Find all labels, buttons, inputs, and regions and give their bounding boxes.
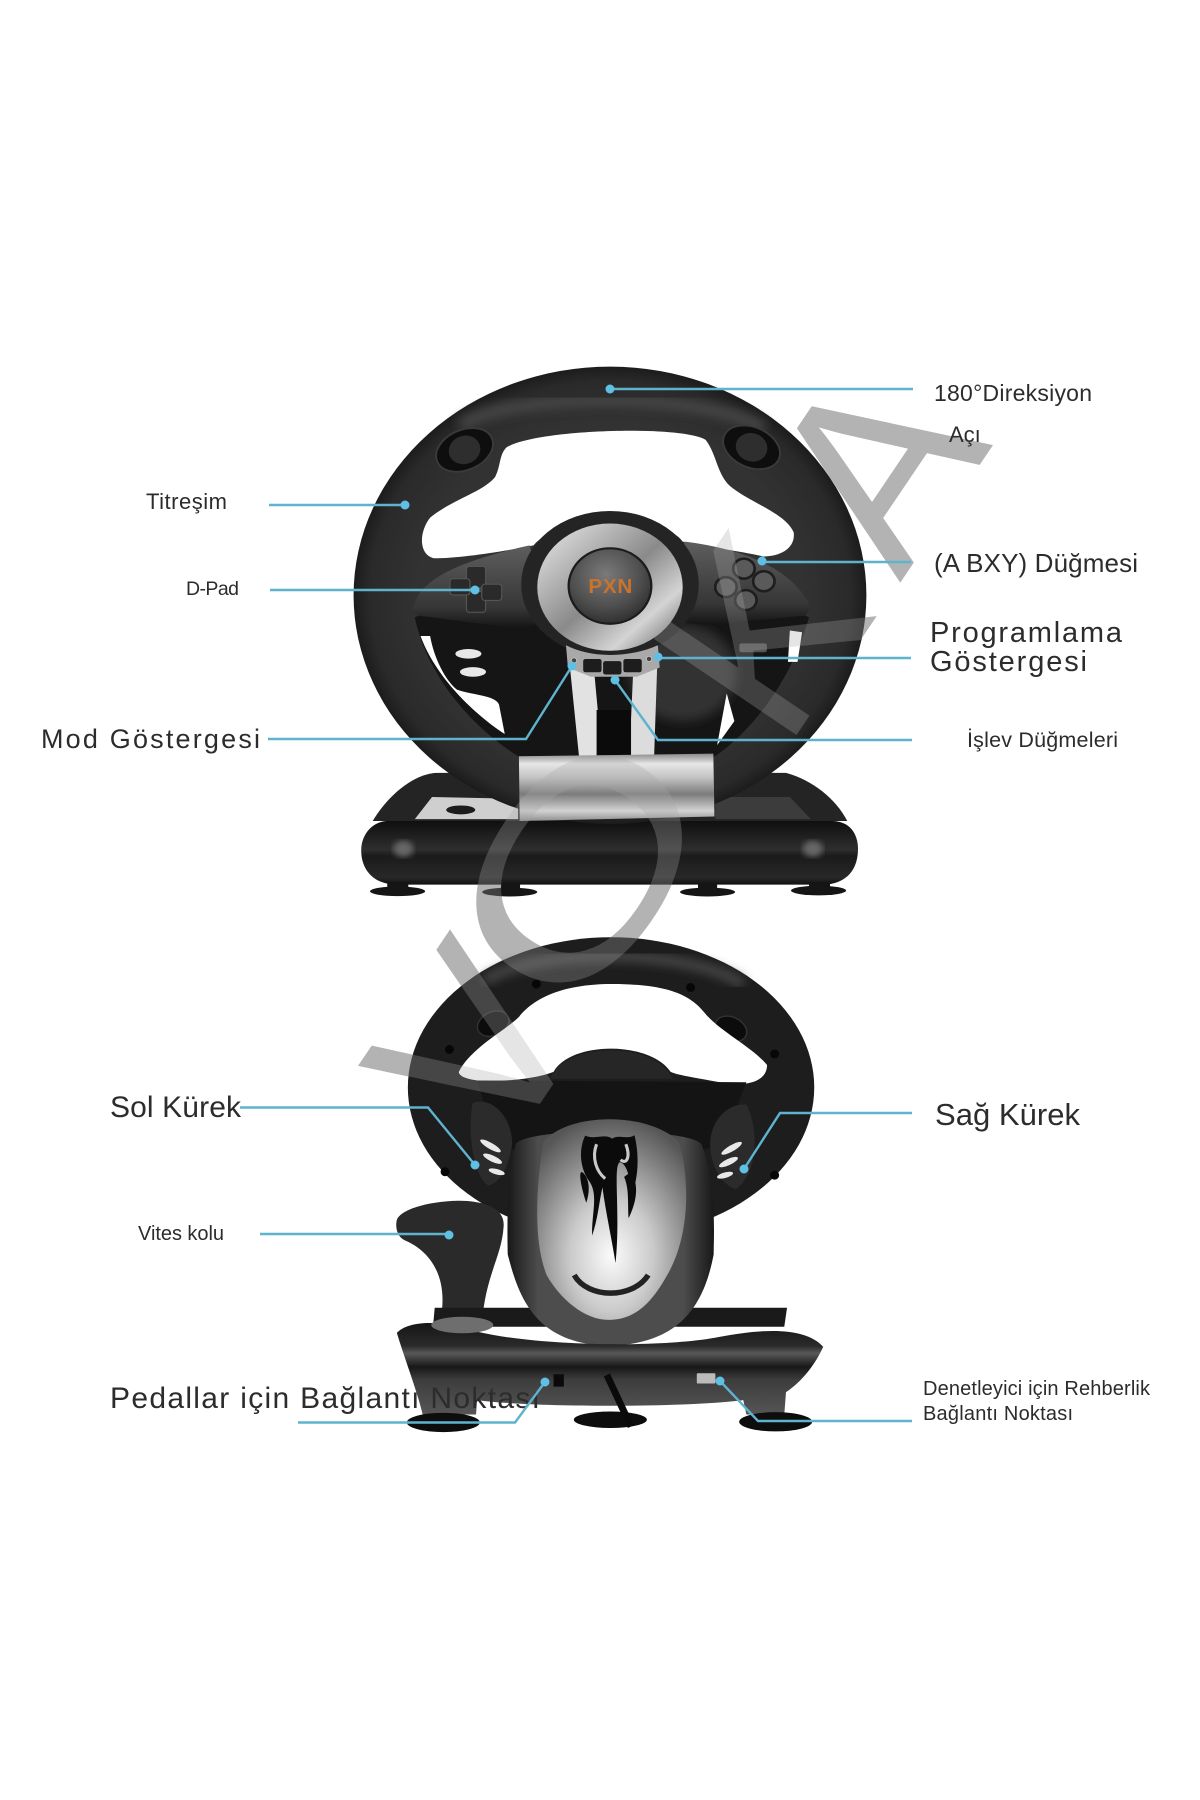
- callout: Vites kolu: Vites kolu: [138, 1223, 224, 1245]
- hub collar: [521, 511, 699, 657]
- flame emblem: [580, 1135, 638, 1263]
- lower silver bar: [519, 754, 714, 821]
- callout: Denetleyici için Rehberlik Bağlantı Noktası: Denetleyici için Rehberlik: [923, 1378, 1151, 1400]
- rear steering wheel: [396, 937, 823, 1432]
- callout: Titreşim: [146, 489, 410, 514]
- callout: Sol Kürek: Sol Kürek: [110, 1091, 242, 1124]
- callout: Sağ Kürek: Sağ Kürek: [935, 1097, 1080, 1132]
- front steering wheel: [354, 367, 866, 896]
- logo cap: [569, 548, 651, 624]
- callout: Vites kolu: [138, 1223, 454, 1245]
- callout: D-Pad: D-Pad: [186, 578, 239, 600]
- lower cavity openings: [421, 630, 802, 745]
- spoke mass: [478, 1080, 746, 1151]
- pedal port: [554, 1374, 564, 1387]
- rear cable: [607, 1375, 631, 1427]
- spoke gap: [597, 710, 631, 758]
- right arm: [667, 542, 811, 625]
- left arm: [413, 545, 549, 629]
- watermark: A: [713, 318, 1037, 613]
- abxy buttons: [715, 559, 775, 610]
- base highlights: [393, 841, 413, 857]
- left paddle: [471, 1102, 512, 1186]
- cavity body shading: [629, 625, 736, 721]
- tray socket: [446, 805, 475, 814]
- lower cavity: [415, 581, 809, 756]
- callout: Programlama Göstergesi: [654, 617, 1123, 678]
- callout: Programlama Göstergesi: Programlama: [930, 617, 1123, 649]
- left paddle vents: [455, 649, 486, 677]
- front base rear plate: [373, 773, 847, 821]
- wheel rim: [354, 367, 866, 824]
- rim highlight: [461, 401, 763, 429]
- usb port: [697, 1373, 715, 1384]
- front base right tray: [715, 797, 811, 819]
- rear base plate: [433, 1308, 787, 1327]
- watermark over products: A: [713, 318, 1037, 613]
- callout: Mod Göstergesi: Mod Göstergesi: [41, 724, 260, 754]
- rear upper opening: [459, 984, 767, 1084]
- label: Pedallar için Bağlantı Noktası: Pedallar için Bağlantı Noktası: [110, 1382, 540, 1415]
- callout: (A BXY) Düğmesi: (A BXY) Düğmesi: [934, 548, 1138, 578]
- front base left tray: [415, 797, 518, 819]
- function plate: [566, 645, 660, 677]
- rear base: [397, 1323, 823, 1415]
- callout: Titreşim: Titreşim: [146, 489, 227, 514]
- silver ring: [537, 524, 683, 651]
- callout: 180° Direksiyon Açı: Açı: [949, 422, 981, 447]
- callout: Sol Kürek: [110, 1091, 480, 1170]
- watermark: V: [313, 898, 637, 1193]
- indicator leds: [571, 656, 652, 663]
- base feet: [370, 882, 846, 896]
- callout: 180° Direksiyon Açı: 180°Direksiyon: [934, 380, 1092, 406]
- watermark: K: [598, 487, 922, 782]
- left shoulder buttons: [429, 420, 500, 480]
- rear pedestal: [507, 1131, 714, 1346]
- shield base slots: [574, 1275, 648, 1293]
- rear wheel rim: [408, 937, 814, 1238]
- watermark over products: K: [598, 487, 922, 782]
- shifter knob: [396, 1201, 504, 1313]
- rear base feet: [407, 1411, 812, 1432]
- paddle vents: [479, 1137, 743, 1180]
- rear rim highlight: [485, 956, 743, 984]
- flame highlights: [595, 1144, 628, 1179]
- callout: 180° Direksiyon Açı: [606, 380, 1092, 447]
- watermark: O: [388, 678, 771, 1060]
- callout: İşlev Düğmeleri: İşlev Düğmeleri: [967, 728, 1118, 752]
- rear dome: [550, 1050, 672, 1079]
- watermark: [313, 318, 1037, 1193]
- callout: (A BXY) Düğmesi: [758, 548, 1138, 578]
- rim screw holes: [441, 980, 779, 1180]
- callout: Mod Göstergesi: [41, 662, 576, 754]
- callout: Denetleyici için Rehberlik Bağlantı Noktası: [716, 1376, 1151, 1425]
- right shoulder buttons: [716, 417, 787, 478]
- PXN logo: PXN: [588, 576, 633, 598]
- callout: Programlama Göstergesi: Göstergesi: [930, 646, 1087, 678]
- shifter gate: [431, 1317, 493, 1333]
- leader: pedal port: [298, 1378, 550, 1422]
- rear shoulder buttons: [473, 1006, 751, 1046]
- right paddle vent: [739, 643, 767, 652]
- watermark over products: O: [388, 678, 771, 1060]
- callout: D-Pad: [186, 578, 480, 600]
- front base: [361, 821, 858, 885]
- d-pad: [450, 566, 502, 612]
- upper opening: [422, 431, 794, 558]
- silver shield: [537, 1119, 686, 1320]
- callout: Denetleyici için Rehberlik Bağlantı Noktası: Bağlantı Noktası: [923, 1403, 1073, 1425]
- callout: İşlev Düğmeleri: [610, 676, 1118, 752]
- watermark over products: V: [313, 898, 637, 1193]
- right paddle: [710, 1104, 755, 1189]
- watermark over products: [313, 318, 1037, 1193]
- function buttons: [583, 659, 642, 674]
- callout: Sağ Kürek: [740, 1097, 1080, 1174]
- centre spokes: [568, 647, 602, 760]
